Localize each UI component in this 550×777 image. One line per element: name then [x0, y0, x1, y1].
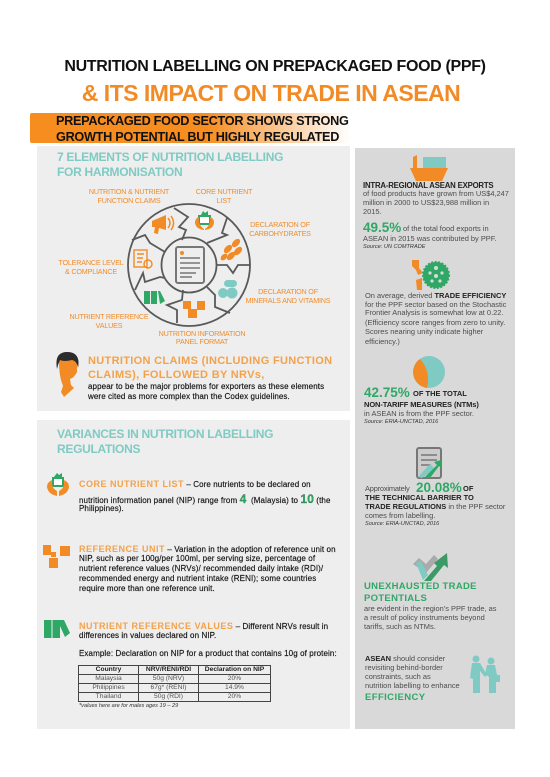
core nutrient list text: nutrition information panel (NIP) range from 4 (Malaysia) to 10 (the: [79, 492, 330, 506]
element labels: VALUES: [96, 321, 122, 330]
stat: trade efficiency: On average, derived TRADE EFFICIENCY: [365, 291, 506, 300]
stat: 20.08 percent: Approximately: [365, 484, 410, 493]
table: declaration on NIP: 50g (RDI): [154, 693, 183, 700]
table note: *values here are for males ages 19 – 29: [79, 703, 178, 709]
heading: variances: VARIANCES IN NUTRITION LABELLING: [57, 427, 273, 441]
claims body: appear to be the major problems for exporters as these elements: [88, 382, 324, 391]
reference unit text: recommended energy and nutrient intake (RENI); some countries: [79, 574, 316, 583]
element labels: [58, 187, 330, 346]
stat: intra-regional exports: of food products have grown from US$4,247: [363, 189, 509, 198]
stat: unexhausted trade potentials: tariffs, such as NTMs.: [364, 622, 436, 631]
stat: trade efficiency: Scores nearing unity indicate higher: [365, 327, 483, 336]
element labels: FUNCTION CLAIMS: [98, 196, 160, 205]
stat: trade efficiency: for the PPF sector based on the Stochastic: [365, 300, 506, 308]
heading: 7 elements: [57, 150, 283, 179]
stat: intra-regional exports: 2015.: [363, 207, 382, 216]
reference unit text: NIP, such as per 100g/per 100ml, per serving size, percentage of: [79, 554, 315, 563]
table: declaration on NIP: [78, 665, 271, 702]
title line 2: & ITS IMPACT ON TRADE IN ASEAN: [82, 80, 460, 106]
pie chart: 42.75 percent: [413, 356, 445, 388]
core nutrient list text: CORE NUTRIENT LIST – Core nutrients to be declared on: [79, 479, 311, 489]
stat: unexhausted trade potentials: a result of policy instruments beyond: [364, 613, 485, 622]
recommendation text: constraints, such as: [365, 672, 431, 681]
orange banner: [30, 113, 350, 143]
icon: pills: [218, 280, 238, 298]
icon: gear: [412, 260, 450, 290]
reference unit text: nutrient reference values (NRVs)/ recommended daily intake (RDI)/: [79, 564, 323, 573]
stat: 42.75 percent: [364, 385, 479, 425]
stat: intra-regional exports: million in 2000 to US$23,988 million in: [363, 198, 489, 207]
stat: intra-regional exports: INTRA-REGIONAL ASEAN EXPORTS: [363, 181, 493, 190]
stat: 42.75 percent: NON-TARIFF MEASURES (NTMs): [364, 400, 479, 409]
table: declaration on NIP: 67g* (RENI): [150, 684, 187, 691]
table: declaration on NIP: Philippines: [92, 684, 125, 691]
label: nutrient reference values: NUTRIENT REFERENCE: [70, 312, 148, 321]
stat: trade efficiency: efficiency.): [365, 337, 400, 346]
stat: trade efficiency: [365, 291, 506, 346]
stat: 20.08 percent: comes from labelling.: [365, 511, 435, 520]
element labels: PANEL FORMAT: [176, 337, 228, 346]
table: declaration on NIP: NRV/RENI/RDI: [146, 666, 191, 673]
stat: intra-regional exports: [363, 181, 509, 216]
stat: unexhausted trade potentials: are evident in the region's PPF trade, as: [364, 604, 496, 613]
icon: ship: [410, 155, 448, 181]
stat: 20.08 percent: 20.08%: [416, 480, 462, 495]
label: nutrition and nutrient function claims: NUTRITION & NUTRIENT: [89, 187, 169, 196]
stat: 42.75 percent: Source: ERIA-UNCTAD, 2016: [364, 419, 438, 425]
label: core nutrient list: CORE NUTRIENT: [196, 187, 252, 196]
banner text: PREPACKAGED FOOD SECTOR SHOWS STRONG: [56, 114, 349, 128]
panel: 7 elements background: [37, 146, 350, 411]
heading: 7 elements: 7 ELEMENTS OF NUTRITION LABELLING: [57, 150, 283, 164]
stat: 42.75 percent: 42.75%: [364, 385, 410, 400]
recommendation text: [365, 654, 460, 703]
icon: grid squares: [183, 301, 205, 318]
recommendation text: nutrition labelling to enhance: [365, 681, 460, 690]
element labels: LIST: [217, 196, 231, 205]
icon: nutrition panel: [176, 247, 204, 283]
table: declaration on NIP: Country: [96, 666, 121, 673]
label: minerals and vitamins: DECLARATION OF: [258, 287, 318, 296]
element labels: CARBOHYDRATES: [249, 229, 311, 238]
icon: binders: [44, 620, 70, 638]
nutrient reference values text: differences in values declared on NIP.: [79, 631, 216, 640]
table: declaration on NIP: Thailand: [96, 693, 121, 700]
table: declaration on NIP: Malaysia: [95, 675, 122, 682]
icon: handshake: [470, 656, 500, 693]
stat: 20.08 percent: [365, 480, 506, 527]
table: declaration on NIP: 20%: [228, 675, 241, 682]
label: carbohydrates: DECLARATION OF: [250, 220, 310, 229]
recommendation text: EFFICIENCY: [365, 692, 425, 703]
core nutrient list text: Philippines).: [79, 504, 124, 513]
icon: person: [56, 352, 78, 397]
table: declaration on NIP: 14.9%: [225, 684, 244, 691]
stat: 49.5 percent: Source: UN COMTRADE: [363, 244, 425, 250]
core nutrient list text: [79, 479, 330, 513]
stat: 42.75 percent: OF THE TOTAL: [413, 389, 467, 398]
claims heading: NUTRITION CLAIMS (INCLUDING FUNCTION: [88, 355, 332, 367]
panel: right statistics background: [355, 148, 515, 729]
stat: unexhausted trade potentials: [364, 581, 496, 631]
reference unit text: REFERENCE UNIT – Variation in the adoption of reference unit on: [79, 544, 336, 554]
stat: unexhausted trade potentials: UNEXHAUSTED TRADE: [364, 581, 477, 592]
banner text: [56, 114, 349, 144]
table: declaration on NIP: 20%: [228, 693, 241, 700]
nutrient reference values text: NUTRIENT REFERENCE VALUES – Different NRVs result in: [79, 621, 328, 631]
heading: variances: [57, 427, 273, 456]
heading: variances: REGULATIONS: [57, 442, 140, 456]
stat: 42.75 percent: in ASEAN is from the PPF sector.: [364, 409, 474, 418]
stat: trade efficiency: Frontier Analysis is somewhat low at 0.22.: [365, 308, 503, 317]
stat: 49.5 percent: of the total food exports in: [403, 224, 489, 233]
icon: upward arrows: [413, 553, 448, 581]
icon: reference unit squares: [43, 545, 70, 568]
table: declaration on NIP: 50g (NRV): [153, 675, 184, 682]
table: declaration on NIP: Declaration on NIP: [205, 666, 264, 673]
icon: basket in hands: [195, 211, 214, 230]
stat: 49.5 percent: ASEAN in 2015 was contributed by PPF.: [363, 234, 497, 243]
stat: 49.5 percent: 49.5%: [363, 220, 401, 235]
nutrient reference values text: Example: Declaration on NIP for a product that contains 10g of protein:: [79, 649, 337, 658]
icon: megaphone: [152, 215, 174, 234]
icon: core nutrient basket: [47, 473, 69, 496]
stat: 20.08 percent: THE TECHNICAL BARRIER TO: [365, 493, 474, 502]
icon: wheat: [219, 237, 244, 262]
stat: unexhausted trade potentials: POTENTIALS: [364, 593, 427, 604]
title line 1: NUTRITION LABELLING ON PREPACKAGED FOOD (PPF): [64, 58, 486, 75]
stat: 20.08 percent: TRADE REGULATIONS in the PPF sector: [365, 502, 505, 511]
element labels: MINERALS AND VITAMINS: [246, 296, 330, 305]
reference unit text: [79, 544, 336, 593]
icon: document with arrow: [416, 447, 442, 479]
claims heading: [88, 355, 332, 381]
recommendation text: revisiting behind-border: [365, 663, 443, 672]
stat: 20.08 percent: Source: ERIA-UNCTAD, 2016: [365, 521, 439, 527]
heading: 7 elements: FOR HARMONISATION: [57, 165, 182, 179]
stat: 20.08 percent: OF: [463, 484, 473, 493]
stat: 49.5 percent: [363, 220, 497, 250]
banner text: GROWTH POTENTIAL BUT HIGHLY REGULATED: [56, 130, 339, 144]
claims body: [88, 382, 324, 401]
claims heading: CLAIMS), FOLLOWED BY NRVs,: [88, 369, 265, 381]
stat: trade efficiency: (Efficiency score ranges from zero to unity.: [365, 318, 505, 327]
icon: clipboard: [134, 250, 152, 268]
claims body: were cited as more complex than the Codex guidelines.: [88, 392, 290, 401]
circular diagram: [127, 203, 251, 327]
reference unit text: require more than one reference unit.: [79, 584, 215, 593]
label: tolerance: TOLERANCE LEVEL: [58, 258, 124, 267]
label: panel format: NUTRITION INFORMATION: [159, 329, 245, 338]
recommendation text: ASEAN should consider: [365, 654, 445, 663]
nutrient reference values text: [79, 621, 337, 658]
element labels: & COMPLIANCE: [65, 267, 117, 276]
icon: binders: [144, 291, 165, 304]
panel: variances background: [37, 420, 350, 729]
